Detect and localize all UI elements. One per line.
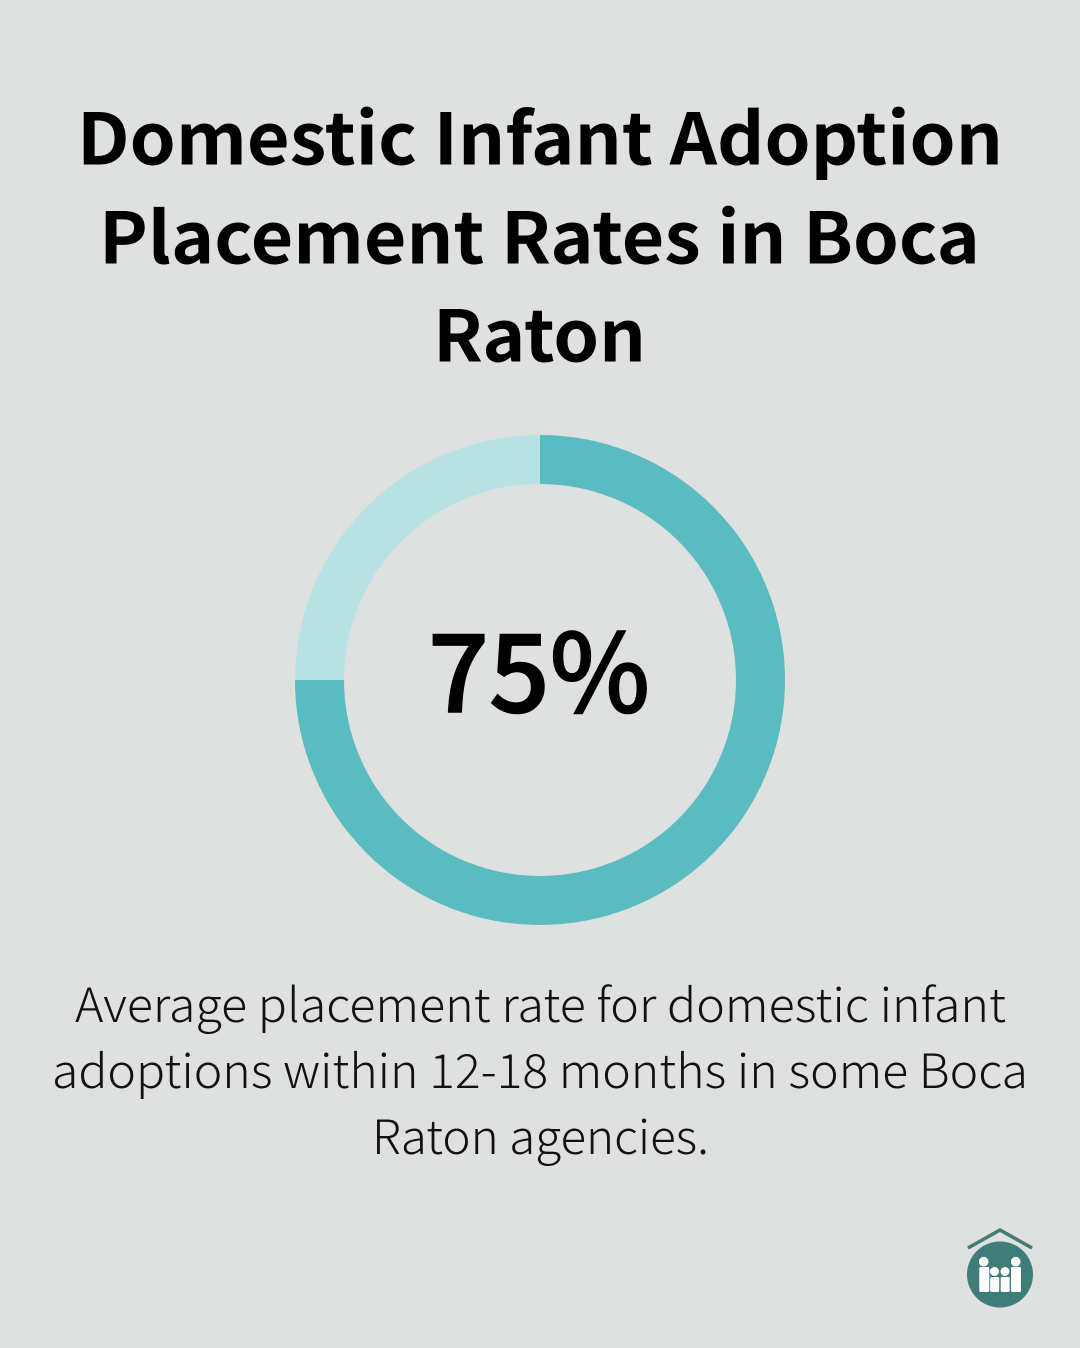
description text [52,967,1028,1168]
title [77,84,1003,382]
description text: adoptions within 12-18 months in some Boca [52,1033,1028,1102]
icon: family house logo [967,1230,1033,1308]
donut chart: 75% [320,460,760,901]
title: Placement Rates in Boca [99,182,980,284]
description text: Raton agencies. [372,1099,709,1168]
donut value: 75% [428,588,650,744]
title: Domestic Infant Adoption [77,84,1003,186]
description text: Average placement rate for domestic infant [75,967,1006,1036]
title: Raton [433,280,646,382]
